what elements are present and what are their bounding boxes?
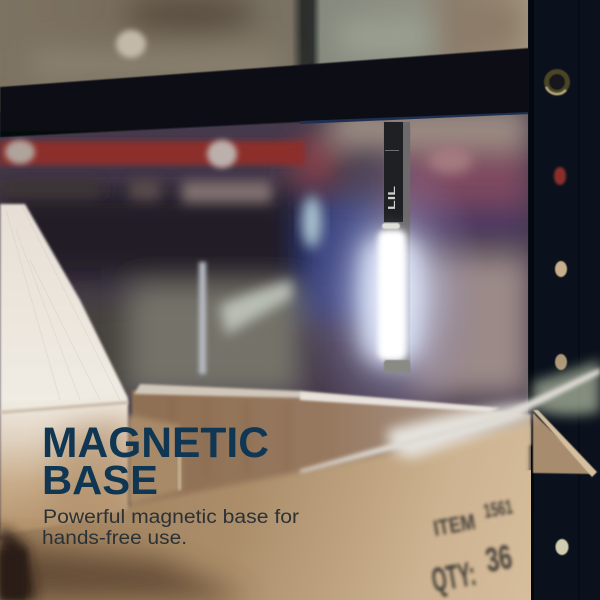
blurred teal light (302, 196, 322, 248)
box inner back flap (132, 390, 531, 520)
motion blur streak (300, 360, 600, 473)
blurred light blob left (5, 140, 35, 164)
light glow around lamp (298, 145, 488, 445)
tan tint on lower flap (40, 415, 128, 530)
printed label: 36 (483, 538, 515, 580)
blurred light blob centre (207, 140, 237, 168)
icon: red peg hole (554, 167, 566, 185)
box front panel base (0, 470, 531, 600)
title (42, 419, 269, 503)
flashlight (362, 122, 420, 373)
blurred ceiling light (116, 30, 146, 58)
printed label: 1561 (482, 496, 514, 523)
box left flap (0, 204, 128, 535)
icon: bolt (544, 69, 570, 95)
description text: hands-free use. (42, 528, 187, 549)
shelf upright post (528, 0, 600, 600)
box front panel top edge (0, 422, 531, 540)
flashlight tail (384, 360, 410, 373)
red beam in background (0, 141, 305, 165)
icon: peg hole (555, 354, 567, 370)
shelf beam (0, 48, 530, 137)
printed label (429, 496, 515, 600)
blurred vertical light streak (199, 262, 206, 374)
description text (42, 507, 300, 549)
box rim highlight (134, 384, 490, 411)
flap corrugation (6, 206, 120, 400)
title: BASE (42, 457, 158, 503)
printed label: QTY: (429, 555, 479, 600)
flashlight brand text: LIL (387, 186, 398, 210)
printed label: ITEM (432, 509, 477, 541)
icon: peg hole (555, 261, 567, 277)
title: MAGNETIC (42, 419, 269, 467)
cardboard box (0, 204, 600, 600)
blurred window light (220, 280, 292, 335)
flap fold line (0, 401, 128, 414)
icon: peg hole (556, 539, 568, 555)
lit lens (362, 223, 420, 365)
description text: Powerful magnetic base for (43, 507, 300, 528)
inner corner fold (128, 415, 182, 505)
box lower left shadow (0, 525, 250, 600)
box right flap (533, 413, 595, 474)
